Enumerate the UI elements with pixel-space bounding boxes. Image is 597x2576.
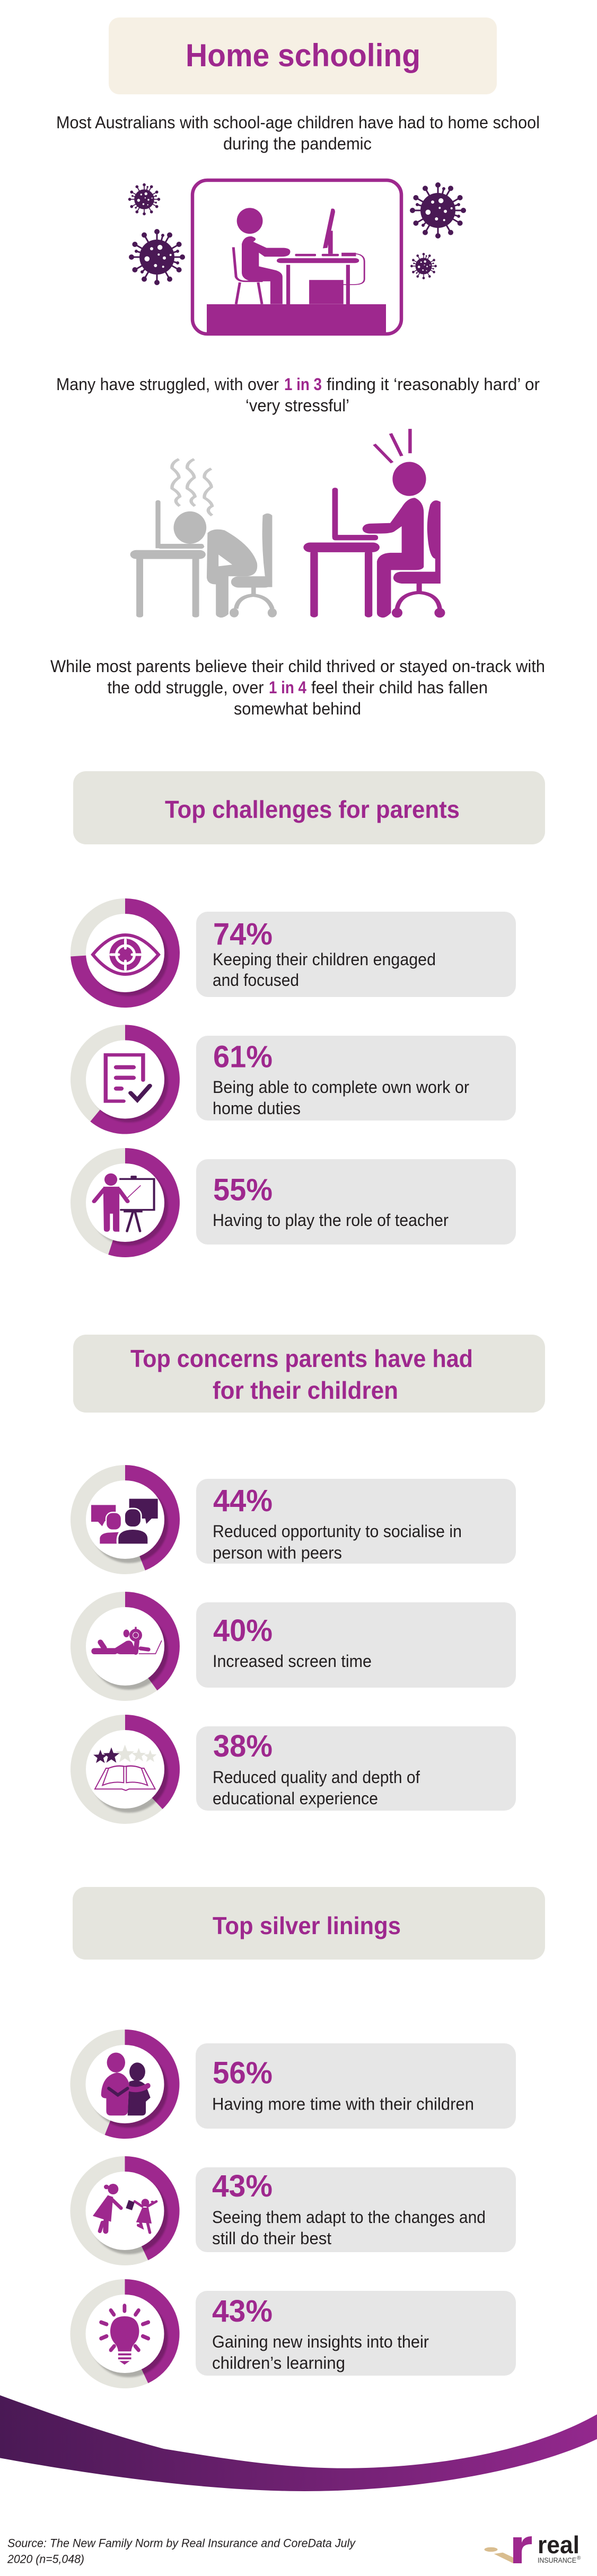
logo: real insurance: ® bbox=[577, 2555, 581, 2561]
icon: parent hugging child bbox=[101, 2052, 151, 2115]
intro text bbox=[56, 113, 540, 153]
card 43% insights: children’s learning bbox=[212, 2353, 345, 2372]
fallen behind text: While most parents believe their child thrived or stayed on-track with bbox=[50, 657, 545, 676]
struggle text: finding it ‘reasonably hard’ or bbox=[327, 375, 540, 394]
card 38%: Reduced quality and depth of bbox=[213, 1768, 420, 1787]
donut 40% bbox=[71, 1592, 180, 1701]
heading: top silver linings bbox=[73, 1887, 545, 1960]
source note: 2020 (n=5,048) bbox=[7, 2553, 84, 2565]
struggle text: Many have struggled, with over bbox=[56, 375, 279, 394]
logo: real insurance: real bbox=[538, 2531, 580, 2559]
card 43% insights: Gaining new insights into their bbox=[212, 2332, 429, 2351]
icon: virus small left bbox=[130, 185, 159, 214]
struggle text: ‘very stressful’ bbox=[245, 396, 349, 415]
card 44%: person with peers bbox=[213, 1543, 342, 1563]
card 61% bbox=[196, 1036, 516, 1121]
fallen behind text: 1 in 4 bbox=[269, 678, 306, 697]
icon: two people talking bbox=[91, 1499, 158, 1543]
icon: light bulb bbox=[101, 2306, 148, 2365]
icon: document with check bbox=[106, 1055, 150, 1101]
illustration: exhausted grey figure bbox=[130, 459, 277, 617]
card 40%: Increased screen time bbox=[213, 1652, 372, 1671]
card 74%: 74% bbox=[213, 917, 273, 951]
donut 43% bbox=[70, 2156, 180, 2265]
logo: real insurance bbox=[485, 2531, 581, 2564]
card 43% adapt: 43% bbox=[212, 2169, 273, 2203]
card 43% insights: 43% bbox=[212, 2294, 273, 2328]
fallen behind text: the odd struggle, over bbox=[107, 678, 264, 697]
card 56%: Having more time with their children bbox=[212, 2095, 474, 2114]
card 61%: home duties bbox=[213, 1099, 301, 1118]
icon: parent and child with school bag bbox=[93, 2184, 156, 2233]
icon: eye target bbox=[93, 935, 159, 974]
heading: top silver linings: Top silver linings bbox=[213, 1912, 401, 1939]
source note: Source: The New Family Norm by Real Insurance and CoreData July bbox=[7, 2537, 356, 2549]
struggle text bbox=[56, 375, 540, 415]
icon: stars and book bbox=[93, 1745, 156, 1790]
card 40%: 40% bbox=[213, 1613, 273, 1648]
heading: top concerns: for their children bbox=[213, 1377, 398, 1404]
card 56% bbox=[196, 2043, 516, 2129]
card 38% bbox=[196, 1726, 516, 1811]
title: Home schooling bbox=[186, 38, 420, 73]
struggle text: 1 in 3 bbox=[284, 375, 322, 394]
fallen behind text: feel their child has fallen bbox=[311, 678, 488, 697]
card 43% insights bbox=[196, 2291, 516, 2376]
panel: concern 44 percent bbox=[71, 1465, 516, 1574]
card 61%: Being able to complete own work or bbox=[213, 1078, 469, 1097]
illustration: parent at computer in frame bbox=[192, 180, 401, 335]
donut 61% bbox=[71, 1025, 180, 1134]
card 43% adapt: Seeing them adapt to the changes and bbox=[212, 2208, 486, 2227]
decorative gradient band bbox=[0, 2395, 597, 2491]
source note bbox=[7, 2537, 356, 2565]
donut 43% bbox=[70, 2279, 180, 2388]
panel: challenge 61 percent bbox=[71, 1025, 516, 1134]
title bbox=[109, 17, 497, 94]
illustration: stressed purple figure bbox=[303, 429, 445, 617]
card 56%: 56% bbox=[213, 2055, 273, 2090]
icon: child lying with laptop bbox=[91, 1627, 162, 1654]
icon: virus small right bbox=[411, 254, 436, 278]
donut 44% bbox=[71, 1465, 180, 1574]
donut 74% bbox=[71, 898, 180, 1008]
panel: silver lining 43 percent adapt bbox=[70, 2156, 516, 2265]
icon: virus large left bbox=[131, 232, 182, 283]
card 40% bbox=[196, 1602, 516, 1688]
panel: silver lining 56 percent bbox=[70, 2030, 516, 2139]
panel: concern 40 percent bbox=[71, 1592, 516, 1701]
card 55% bbox=[196, 1159, 516, 1245]
heading: top challenges: Top challenges for parents bbox=[165, 796, 460, 823]
card 74% bbox=[196, 912, 516, 997]
panel: challenge 55 percent bbox=[71, 1148, 516, 1257]
fallen behind text bbox=[50, 657, 545, 718]
intro text: during the pandemic bbox=[223, 134, 372, 153]
card 38%: 38% bbox=[213, 1729, 273, 1763]
logo: real insurance: INSURANCE bbox=[538, 2556, 576, 2564]
donut 55% bbox=[71, 1148, 180, 1257]
heading: top concerns bbox=[73, 1335, 545, 1413]
icon: teacher at board bbox=[94, 1174, 154, 1232]
card 44% bbox=[196, 1479, 516, 1564]
card 43% adapt: still do their best bbox=[212, 2229, 331, 2248]
card 43% adapt bbox=[196, 2167, 516, 2252]
card 74%: Keeping their children engaged bbox=[213, 950, 436, 969]
panel: challenge 74 percent bbox=[71, 898, 516, 1008]
card 61%: 61% bbox=[213, 1040, 273, 1074]
card 44%: 44% bbox=[213, 1484, 273, 1518]
card 38%: educational experience bbox=[213, 1789, 378, 1808]
heading: top concerns: Top concerns parents have had bbox=[130, 1345, 473, 1372]
intro text: Most Australians with school-age children have had to home school bbox=[56, 113, 540, 132]
donut 56% bbox=[70, 2030, 179, 2139]
heading: top challenges bbox=[73, 771, 545, 844]
card 74%: and focused bbox=[213, 971, 299, 990]
card 55%: 55% bbox=[213, 1172, 273, 1207]
panel: concern 38 percent bbox=[71, 1715, 516, 1824]
donut 38% bbox=[71, 1715, 180, 1824]
card 44%: Reduced opportunity to socialise in bbox=[213, 1522, 462, 1541]
icon: virus large right bbox=[412, 185, 463, 236]
fallen behind text: somewhat behind bbox=[234, 699, 361, 718]
card 55%: Having to play the role of teacher bbox=[213, 1211, 449, 1230]
panel: silver lining 43 percent insights bbox=[70, 2279, 516, 2388]
